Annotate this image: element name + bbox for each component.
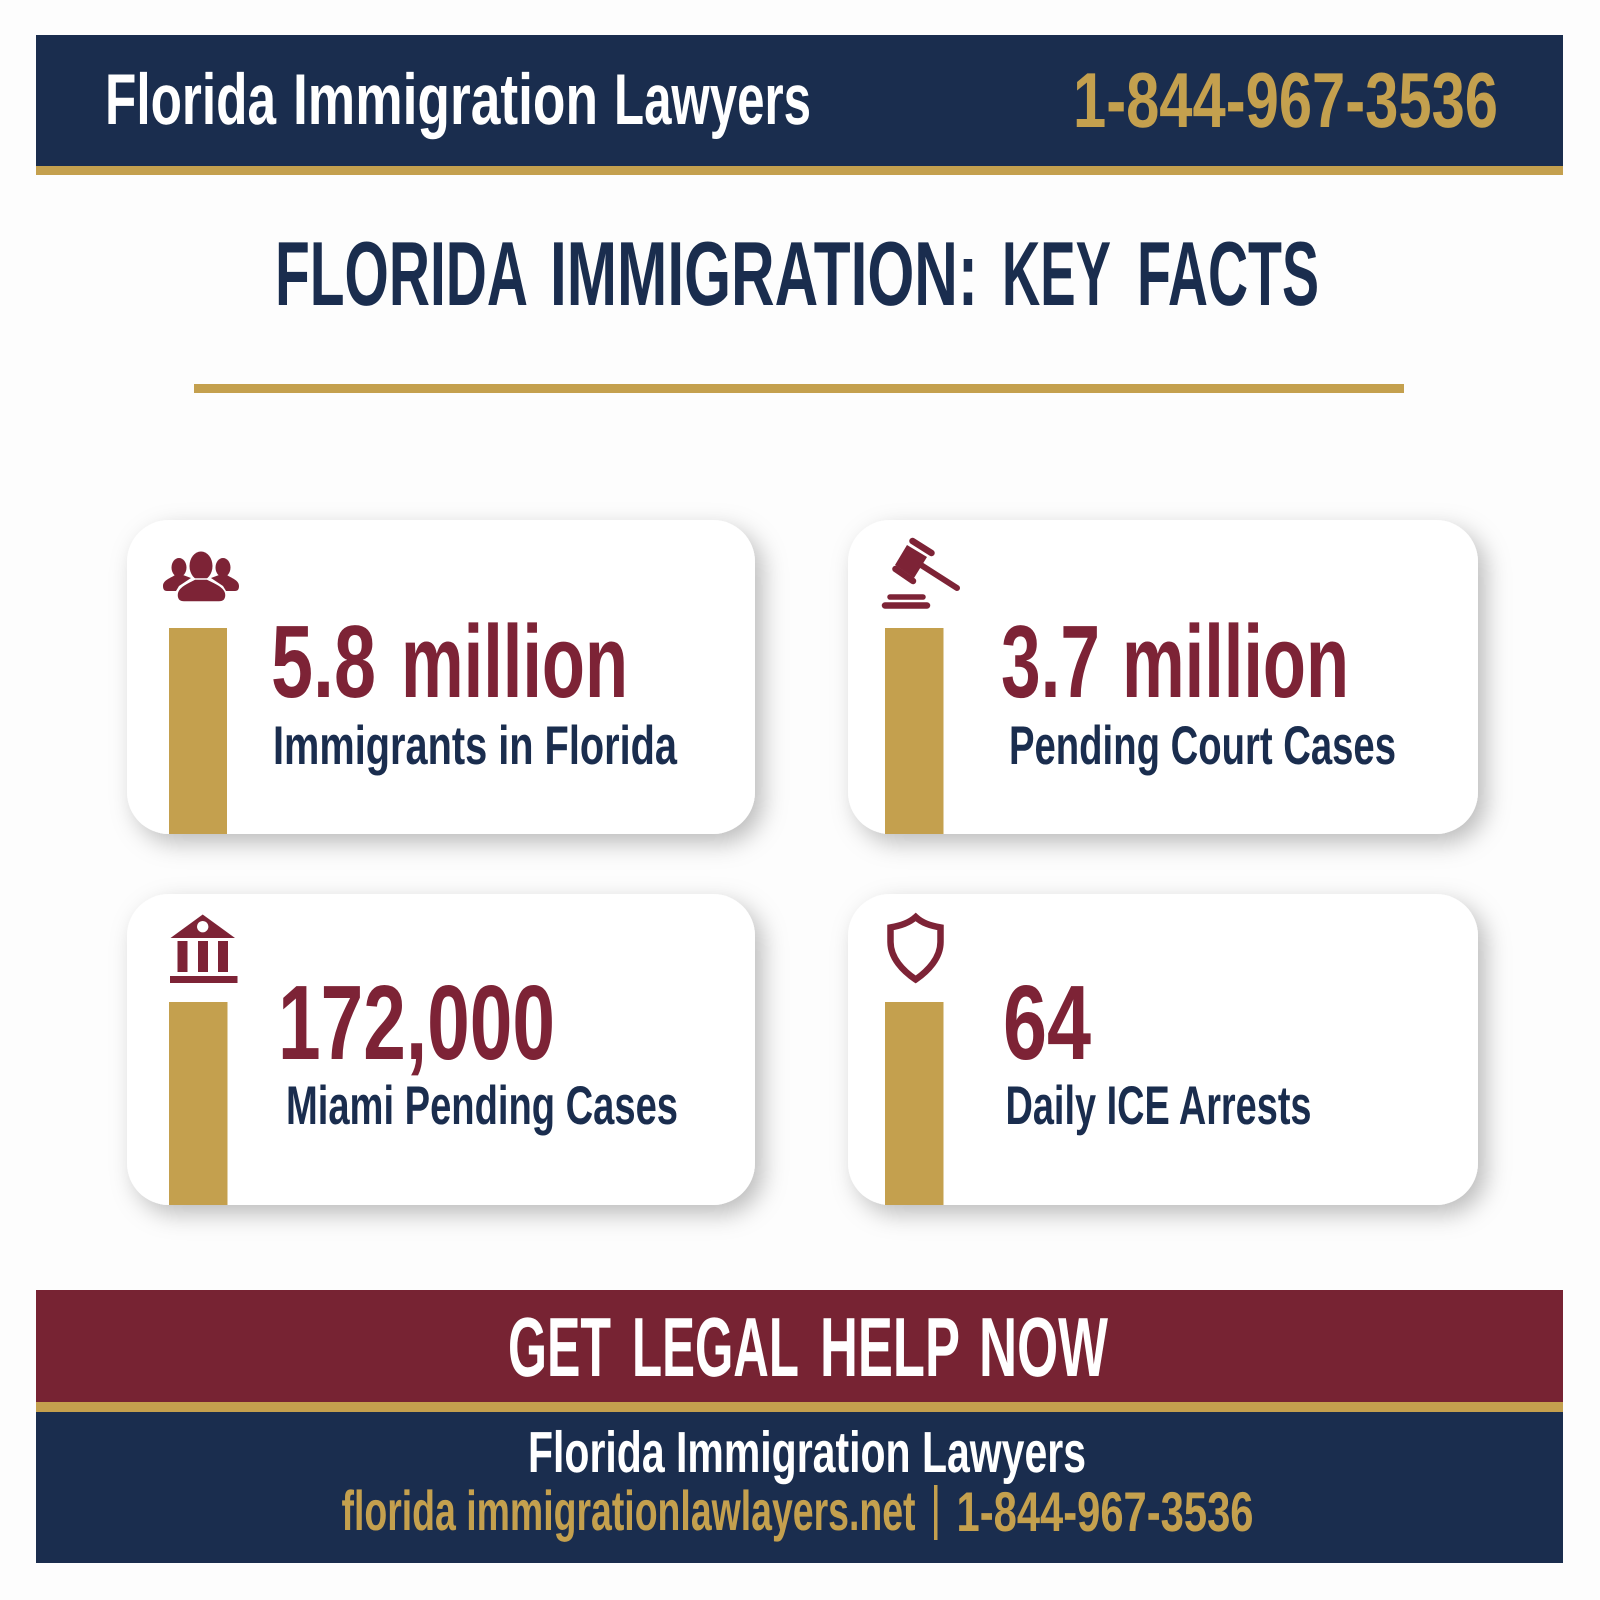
gold bar — [885, 628, 944, 834]
footer divider — [36, 1402, 1563, 1412]
call to action banner — [36, 1290, 1563, 1402]
footer firm name: Florida Immigration Lawyers — [528, 1420, 1086, 1485]
stat value: 5.8 — [271, 604, 376, 719]
call to action text: NOW — [979, 1300, 1108, 1394]
panel: Miami pending cases — [127, 894, 755, 1205]
main title: KEY — [1002, 224, 1111, 325]
panel: daily ICE arrests — [848, 894, 1478, 1205]
footer contact band — [36, 1412, 1563, 1563]
header band — [36, 35, 1563, 175]
main title: IMMIGRATION: — [550, 224, 978, 325]
gold bar — [169, 628, 227, 834]
stat value — [1001, 604, 1349, 719]
header firm name: Lawyers — [614, 60, 811, 140]
call to action text: GET — [508, 1300, 611, 1394]
icon: courthouse — [170, 914, 238, 983]
main title — [275, 224, 1319, 325]
panel: pending court cases — [848, 520, 1478, 834]
main title: FACTS — [1137, 224, 1319, 325]
call to action text: HELP — [820, 1300, 960, 1394]
main title: FLORIDA — [275, 224, 528, 325]
stat label: Pending Court Cases — [1009, 715, 1396, 776]
stat label: Miami Pending Cases — [286, 1075, 678, 1136]
footer separator — [934, 1485, 938, 1540]
stat value: 3.7 — [1001, 604, 1100, 719]
header firm name: Immigration — [293, 60, 598, 140]
footer phone number: 1-844-967-3536 — [956, 1480, 1254, 1543]
stat value: 172,000 — [278, 964, 555, 1082]
gold bar — [885, 1002, 944, 1205]
stat value: million — [1122, 604, 1349, 719]
stat value — [271, 604, 628, 719]
title divider — [194, 384, 1404, 393]
icon: shield — [890, 917, 940, 980]
header firm name: Florida — [105, 60, 277, 140]
stat label: Immigrants in Florida — [273, 715, 678, 776]
call to action text — [508, 1300, 1108, 1394]
stat label: Daily ICE Arrests — [1006, 1075, 1312, 1136]
stat value: million — [401, 604, 628, 719]
gold bar — [169, 1002, 228, 1205]
header firm name — [105, 60, 811, 140]
panel: immigrants in Florida — [127, 520, 755, 834]
icon: people group — [163, 552, 239, 602]
footer website: florida immigrationlawlayers.net — [342, 1479, 916, 1542]
call to action text: LEGAL — [632, 1300, 799, 1394]
stat value: 64 — [1003, 964, 1091, 1082]
icon: gavel — [885, 541, 957, 606]
